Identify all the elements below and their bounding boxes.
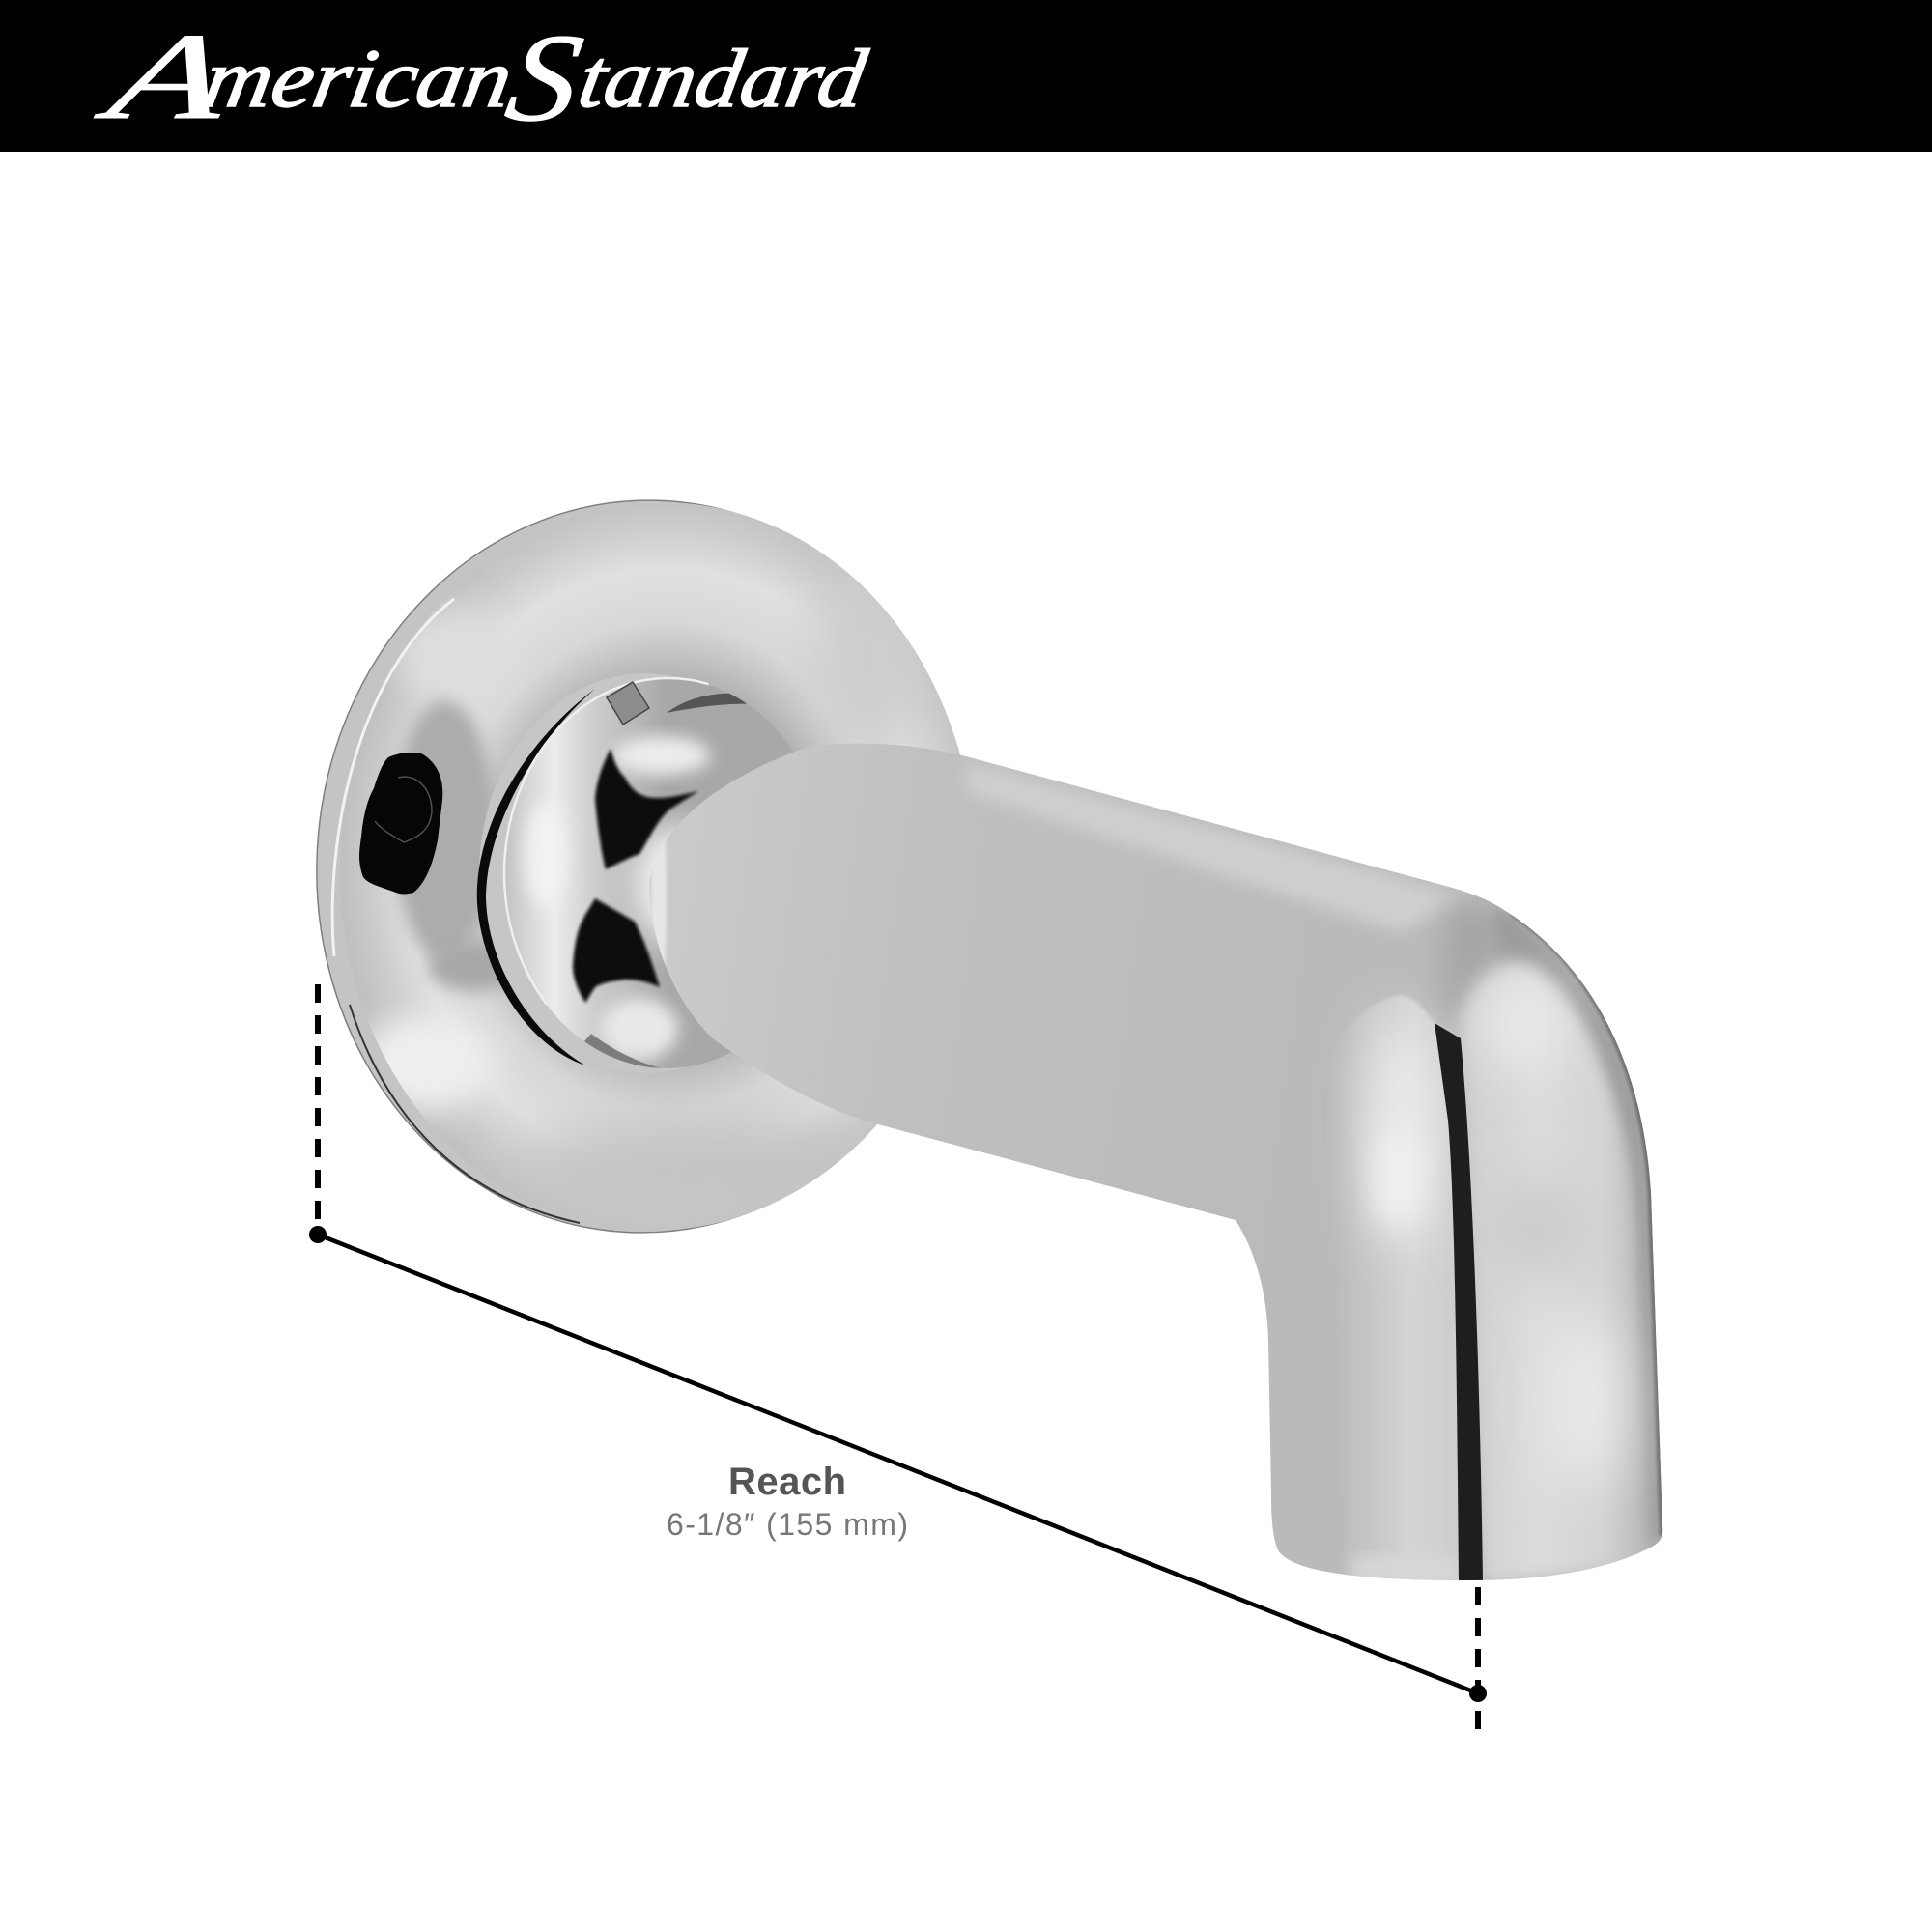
logo: American Standard: merican bbox=[198, 33, 519, 125]
black reflection stripe bbox=[1435, 1023, 1483, 1580]
header bar bbox=[0, 0, 1932, 152]
black crescent bbox=[477, 689, 595, 1065]
spout body bbox=[638, 734, 1681, 1594]
logo: American Standard: A bbox=[87, 8, 243, 145]
logo: American Standard bbox=[87, 8, 873, 148]
label: reach bbox=[667, 1461, 908, 1542]
upper reflection bbox=[595, 749, 698, 869]
collar bbox=[477, 673, 794, 1070]
logo: American Standard: S bbox=[497, 9, 591, 148]
logo: American Standard: tandard bbox=[573, 33, 873, 125]
hole reflection bbox=[359, 753, 442, 895]
lower reflection bbox=[573, 898, 660, 1003]
product image: tub spout bbox=[298, 483, 1681, 1594]
wall plate bbox=[316, 499, 960, 1234]
outer dark band bbox=[1492, 903, 1662, 1546]
set screw bbox=[607, 682, 649, 724]
elbow panel left bbox=[1347, 995, 1459, 1580]
label: reach: 6-1/8″ (155 mm) bbox=[667, 1507, 908, 1542]
reach dimension line bbox=[309, 984, 1487, 1729]
dark shoulder above stripe bbox=[1437, 898, 1499, 1024]
elbow panel right bbox=[1461, 964, 1650, 1584]
label: reach: Reach bbox=[728, 1461, 846, 1503]
